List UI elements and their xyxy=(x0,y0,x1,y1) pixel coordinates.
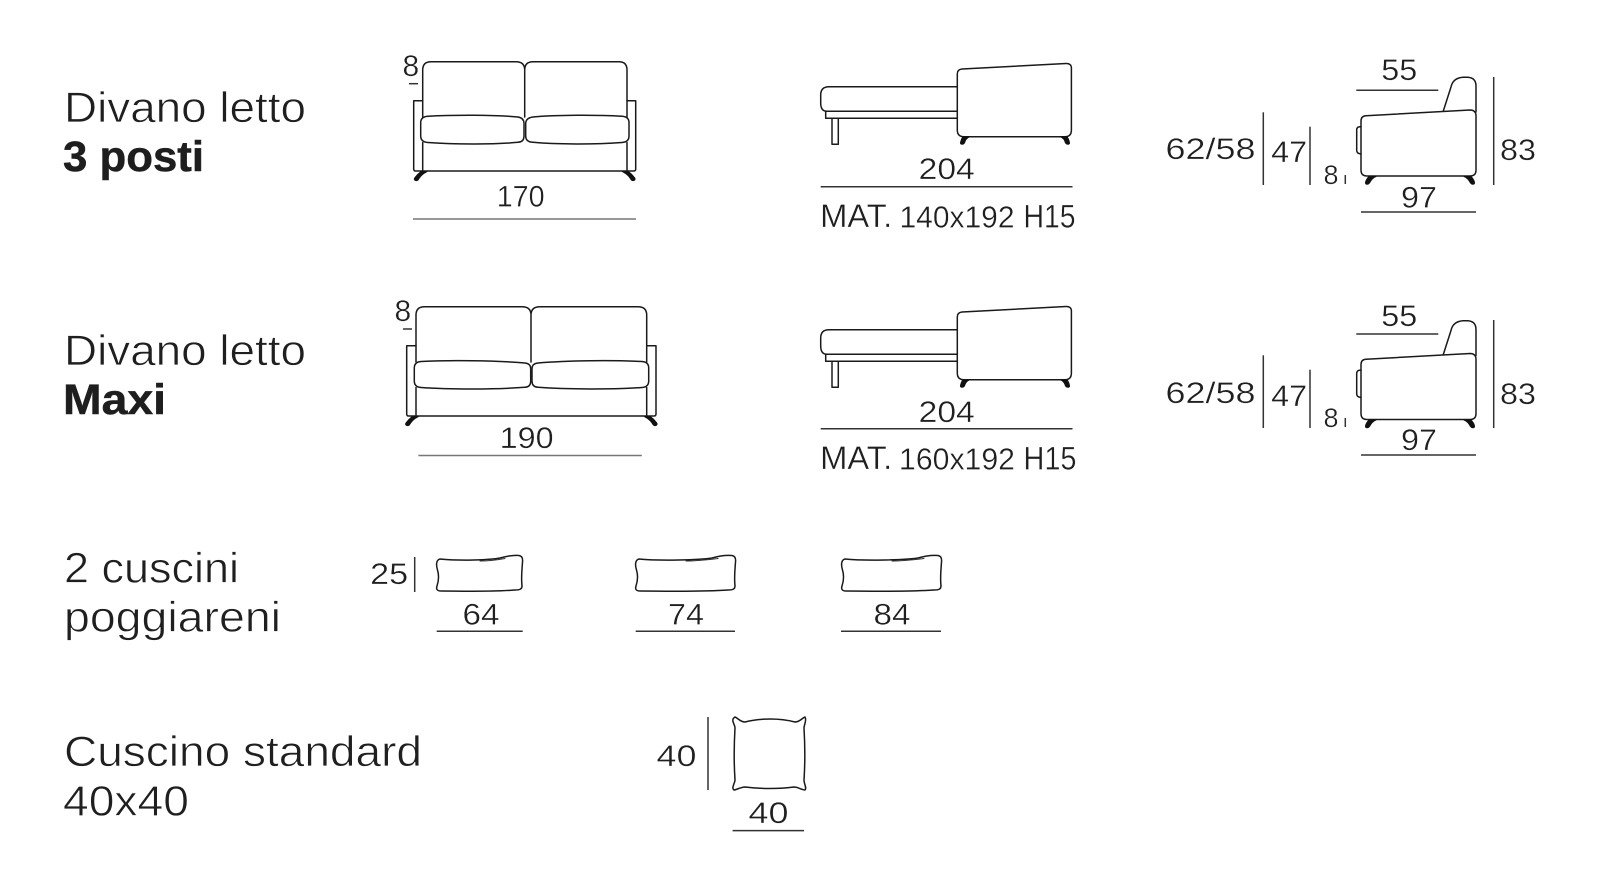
dimension: foot height 8 xyxy=(1324,403,1345,433)
panel: 2 cuscini poggiareni xyxy=(64,545,942,642)
panel: divano letto Maxi xyxy=(63,295,1536,476)
dimension: open length 204: 204 xyxy=(919,153,975,186)
side view: closed sofa 3 posti xyxy=(1357,77,1476,184)
dimension: total height 83 xyxy=(1494,320,1536,428)
heading: Divano letto 3 posti xyxy=(63,84,306,181)
dimension: foot height 8 xyxy=(1324,160,1345,190)
panel: cuscino standard xyxy=(63,717,806,831)
side view: open bed 3 posti xyxy=(821,63,1071,144)
dimension: depth 55 xyxy=(1356,300,1438,334)
dimension: back height 8: 8 xyxy=(402,50,419,83)
dimension: width 190: 190 xyxy=(500,422,554,455)
dimension: depth 97: 97 xyxy=(1401,182,1437,214)
dimension: depth 55: 55 xyxy=(1381,54,1417,87)
dimension: heights 62/58 xyxy=(1166,355,1263,428)
mattress size 160x192 H15: 160x192 xyxy=(899,442,1015,476)
icon: lumbar cushion 74: 74 xyxy=(668,598,704,632)
icon: square pillow xyxy=(733,717,806,790)
dimension: heights 62/58: 62/58 xyxy=(1166,133,1256,166)
mattress size 140x192 H15: 140x192 xyxy=(900,200,1014,234)
icon: lumbar cushion 64: 64 xyxy=(462,598,500,632)
heading: Divano letto 3 posti: Divano letto xyxy=(64,84,306,132)
heading: 2 cuscini poggiareni xyxy=(64,545,281,642)
mattress size 140x192 H15 xyxy=(820,198,1076,234)
dimension: foot height 8: 8 xyxy=(1324,403,1339,433)
front view: Maxi sofa xyxy=(406,307,657,426)
heading: Cuscino standard 40x40 xyxy=(63,728,422,826)
heading: Divano letto Maxi xyxy=(63,327,306,424)
mattress size 160x192 H15: MAT. xyxy=(820,440,892,476)
heading: 2 cuscini poggiareni: 2 cuscini xyxy=(64,545,239,593)
dimension: seat height 47 xyxy=(1271,370,1310,428)
dimension: pillow width 40 xyxy=(733,797,804,831)
mattress size 140x192 H15: H15 xyxy=(1024,198,1076,234)
dimension: heights 62/58 xyxy=(1166,112,1263,185)
side view: open bed Maxi xyxy=(821,306,1071,387)
dimension: depth 97 xyxy=(1361,182,1476,214)
dimension: cushion height 25: 25 xyxy=(370,558,408,591)
dimension: total height 83: 83 xyxy=(1500,134,1536,167)
dimension: width 170: 170 xyxy=(497,181,545,214)
heading: Cuscino standard 40x40: 40x40 xyxy=(63,778,189,826)
dimension: depth 55 xyxy=(1356,54,1438,90)
dimension: foot height 8: 8 xyxy=(1324,160,1339,190)
dimension: pillow width 40: 40 xyxy=(748,797,788,830)
dimension: depth 97: 97 xyxy=(1401,424,1437,457)
heading: Cuscino standard 40x40: Cuscino standard xyxy=(64,728,422,776)
icon: lumbar cushion 74 xyxy=(636,555,736,632)
dimension: open length 204: 204 xyxy=(919,396,975,429)
dimension: pillow height 40: 40 xyxy=(656,740,696,773)
dimension: depth 97 xyxy=(1361,424,1476,457)
icon: lumbar cushion 84 xyxy=(841,555,942,632)
dimension: total height 83 xyxy=(1494,77,1536,185)
side view: closed sofa Maxi xyxy=(1357,321,1476,428)
heading: Divano letto Maxi: Divano letto xyxy=(64,327,306,375)
dimension: seat height 47 xyxy=(1271,127,1310,185)
dimension: pillow height 40 xyxy=(656,717,708,790)
icon: lumbar cushion 84: 84 xyxy=(874,598,910,632)
front view: 3 posti sofa xyxy=(414,62,636,181)
dimension: seat height 47: 47 xyxy=(1271,136,1307,169)
heading: Divano letto 3 posti: 3 posti xyxy=(63,133,204,181)
mattress size 160x192 H15 xyxy=(820,440,1076,476)
dimension: total height 83: 83 xyxy=(1500,378,1536,411)
icon: lumbar cushion 64 xyxy=(437,555,523,632)
mattress size 160x192 H15: H15 xyxy=(1024,440,1076,476)
dimension: heights 62/58: 62/58 xyxy=(1166,377,1256,410)
dimension: depth 55: 55 xyxy=(1381,300,1417,333)
heading: 2 cuscini poggiareni: poggiareni xyxy=(64,594,281,642)
heading: Divano letto Maxi: Maxi xyxy=(63,376,166,424)
panel: divano letto 3 posti xyxy=(63,50,1536,234)
dimension: seat height 47: 47 xyxy=(1271,380,1307,413)
dimension: back height 8: 8 xyxy=(394,295,411,328)
mattress size 140x192 H15: MAT. xyxy=(820,198,892,234)
